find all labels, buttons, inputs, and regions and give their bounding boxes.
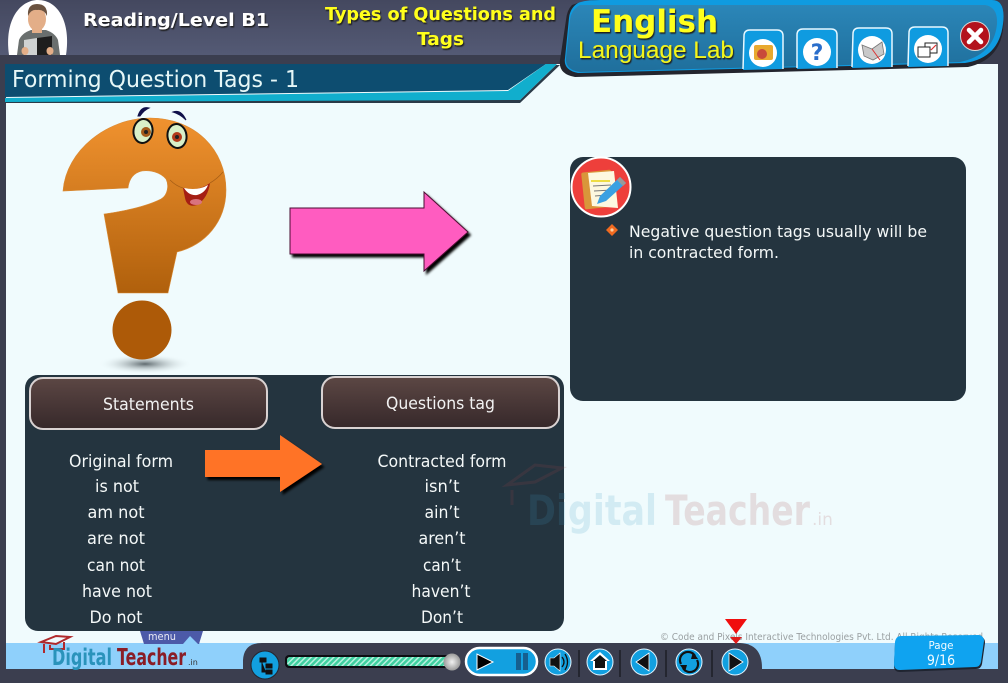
panel: note [570,157,966,401]
progress bar [285,654,460,670]
icon: next [722,649,748,675]
icon: home [587,649,613,675]
heading: topic: Types of Questions and [325,4,556,25]
avatar: reader [8,0,67,55]
column: question tags: haven’t [412,582,471,601]
title banner: Forming Question Tags - 1 [12,67,299,93]
icon tab: book [852,28,892,68]
watermark: Digital [527,486,657,535]
question mark character [63,108,226,374]
watermark [507,465,833,535]
column: statements: have not [82,582,152,601]
header bar [0,0,600,55]
mouth [183,183,210,206]
column: statements: Do not [90,608,143,627]
arrow: orange [205,435,322,492]
heading: topic [325,4,556,50]
page counter [894,635,985,672]
column: question tags: Don’t [421,608,463,627]
logo: Digital Teacher: Digital [52,645,112,671]
watermark: .in [812,510,833,530]
button: Statements [30,378,267,429]
footer band [6,643,998,669]
watermark: Teacher [665,486,810,535]
column: statements [69,452,173,627]
brand panel: English Language Lab [560,0,1004,77]
brand panel: English Language Lab: Language Lab [578,37,734,64]
menu tab [140,631,203,644]
icon: speaker [545,649,571,675]
column: statements: can not [87,556,145,575]
icon tab: window [908,27,948,67]
button: Statements: Statements [103,395,194,414]
page counter: 9/16 [927,653,955,669]
question mark dot [112,300,172,360]
question mark glyph [63,118,226,293]
heading: level: Reading/Level B1 [83,10,269,31]
column: question tags [378,452,506,627]
menu tab: menu [148,631,176,643]
column: question tags: Contracted form [378,452,506,471]
icon: tree menu [251,651,279,679]
column: question tags: aren’t [418,529,466,548]
title banner [5,64,560,103]
button: Questions tag: Questions tag [386,394,495,413]
page counter: Page [928,640,954,652]
icon: close [960,22,990,50]
player control bar [243,643,762,683]
icon: refresh [676,649,702,675]
icon tab: help: ? [811,41,823,66]
panel: forms table [25,375,564,631]
column: statements: am not [88,503,145,522]
left eye [132,118,154,144]
arrow: pink [290,192,468,271]
column: question tags: ain’t [424,503,460,522]
icon tab: help [797,29,837,69]
note text: Negative question tags usually will be [629,222,927,241]
column: statements: Original form [69,452,173,471]
logo: Digital Teacher: Teacher [117,645,186,671]
marker: red arrow [725,619,747,644]
brand panel: English Language Lab: English [591,4,718,40]
question mark shadow [98,354,192,374]
right eye [166,123,188,149]
bullet [606,224,618,236]
note text: in contracted form. [629,243,779,262]
icon: notepad [572,158,630,216]
copyright: © Code and Pixels Interactive Technologies Pvt. Ltd. All Rights Reserved [660,632,983,643]
icon: previous [631,649,657,675]
logo: Digital Teacher [41,636,198,671]
eyebrows [138,108,186,120]
heading: topic: Tags [417,29,464,50]
button: Questions tag [322,377,559,428]
note text [629,222,927,262]
play pause pill [466,648,537,675]
column: statements: are not [87,529,146,548]
column: question tags: isn’t [424,477,460,496]
column: statements: is not [95,477,140,496]
smile line [170,172,223,188]
logo: Digital Teacher: .in [188,658,198,667]
icon tab: folder clock [743,30,783,70]
column: question tags: can’t [423,556,461,575]
control separators [579,650,712,677]
